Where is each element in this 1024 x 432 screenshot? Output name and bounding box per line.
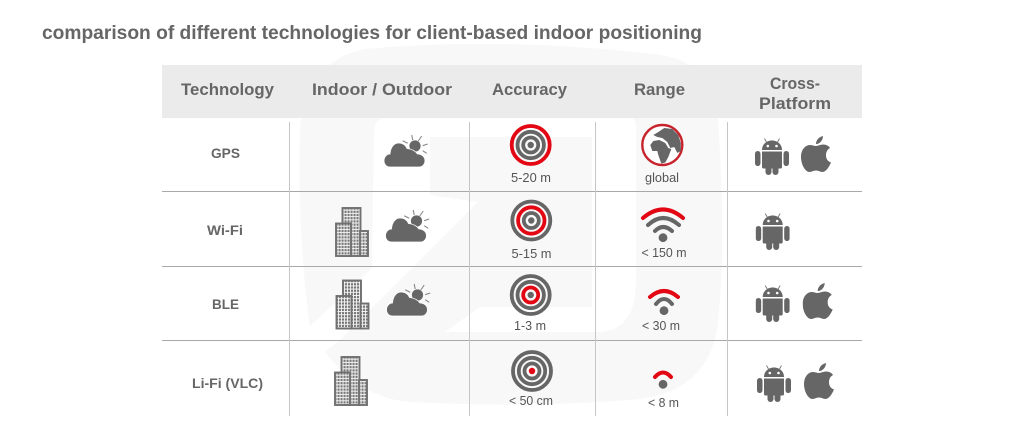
icon: accuracy target, outer ring red — [512, 126, 550, 164]
icon: accuracy target, centre red — [513, 352, 551, 390]
icon: android — [755, 138, 789, 175]
row: Li-Fi (VLC) — [192, 352, 834, 410]
value: 1-3 m: 1-3 m — [514, 318, 546, 333]
icon: building — [336, 208, 368, 256]
value: < 150 m: < 150 m — [642, 245, 686, 260]
heading: Cross-Platform — [759, 75, 831, 113]
title: comparison of different technologies for client-based indoor positioning — [42, 23, 702, 44]
icon: apple — [803, 283, 833, 319]
icon: android — [756, 286, 790, 322]
heading: Cross-Platform: Cross- — [770, 75, 820, 93]
icon: apple — [801, 136, 831, 172]
heading: Technology: Technology — [181, 81, 275, 99]
row: Wi-Fi — [207, 202, 790, 261]
value: < 50 cm: < 50 cm — [509, 393, 553, 408]
heading: Cross-Platform: Platform — [759, 95, 831, 113]
icon: cloud and sun — [384, 135, 428, 167]
value: 5-15 m: 5-15 m — [512, 246, 552, 261]
heading: Accuracy: Accuracy — [492, 81, 568, 99]
table header band — [162, 65, 862, 118]
heading: Range: Range — [634, 81, 685, 99]
icon: globe — [642, 125, 682, 165]
row: BLE — [212, 276, 833, 333]
icon: apple — [804, 363, 834, 399]
icon: wifi range, small — [655, 372, 671, 389]
heading: Indoor / Outdoor: Indoor / Outdoor — [312, 81, 453, 99]
label: Li-Fi (VLC): Li-Fi (VLC) — [192, 375, 263, 391]
icon: building — [335, 357, 367, 405]
icon: accuracy target, third ring red — [512, 276, 550, 314]
value: < 8 m: < 8 m — [648, 395, 679, 410]
icon: accuracy target, second ring red — [512, 202, 550, 240]
icon: wifi range, medium — [650, 291, 678, 315]
value: < 30 m: < 30 m — [642, 318, 680, 333]
label: BLE: BLE — [212, 296, 239, 312]
label: GPS: GPS — [211, 145, 240, 161]
label: Wi-Fi: Wi-Fi — [207, 222, 243, 238]
icon: android — [757, 366, 791, 402]
value: 5-20 m: 5-20 m — [511, 170, 551, 185]
value: global: global — [645, 170, 679, 185]
icon: wifi range, large — [643, 210, 683, 242]
icon: android — [756, 214, 790, 250]
watermark logo — [299, 44, 722, 405]
icon: cloud and sun — [386, 210, 429, 242]
row: GPS — [211, 125, 831, 185]
icon: building — [336, 280, 368, 328]
icon: cloud and sun — [386, 284, 430, 316]
